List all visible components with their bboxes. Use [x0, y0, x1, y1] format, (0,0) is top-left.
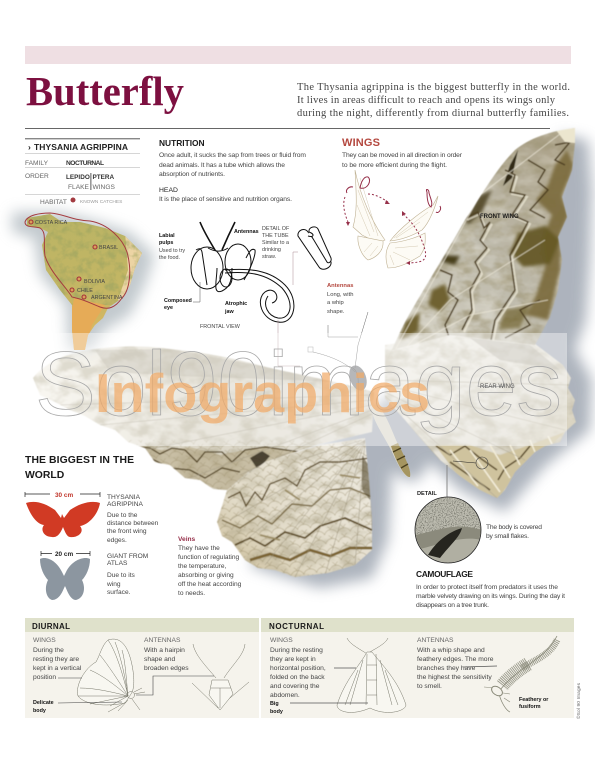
nutrition text: Once adult, it sucks the sap from trees or fluid from [159, 152, 306, 159]
feathery label: Feathery or [519, 697, 549, 703]
nocturnal leader lines [290, 666, 497, 703]
head drawing labels [159, 226, 290, 330]
wings text: They can be moved in all direction in order [342, 152, 463, 159]
panel: nocturnal: NOCTURNAL [269, 622, 324, 631]
intro text: The Thysania agrippina is the biggest butterfly in the world. [297, 82, 570, 93]
head drawing labels: eye [164, 305, 173, 311]
veins callout: They have the [178, 545, 220, 552]
gray butterfly silhouette [40, 558, 90, 600]
thysania info table: KNOWN CATCHES [80, 199, 122, 205]
head drawing labels: Antennas [234, 229, 259, 235]
size comparison texts: wing [106, 581, 121, 588]
20 cm dimension: 20 cm [55, 551, 73, 558]
nutrition text: dead animals. It has a tube which allows the [159, 162, 285, 169]
thysania info table: WINGS [92, 184, 115, 191]
diurnal antenna head drawing [192, 644, 249, 710]
map: country labels: BRASIL [99, 245, 118, 251]
wings text: WINGS [342, 137, 380, 149]
camouflage text: disappears on a tree trunk. [416, 602, 489, 609]
nocturnal antennas text: the highest the sensitivity [417, 674, 492, 681]
diurnal antennas text: broaden edges [144, 665, 189, 672]
head drawing labels: THE TUBE [262, 233, 289, 239]
thysania info table: THYSANIA AGRIPPINA [34, 142, 128, 152]
feathery antenna drawing [484, 636, 557, 712]
camouflage text: marble velvety drawing on its wings. During the day it [416, 593, 565, 600]
left hind wing [216, 438, 373, 578]
thysania info table: HABITAT [40, 199, 67, 206]
nutrition text: absorption of nutrients. [159, 171, 225, 178]
diurnal wings text [33, 637, 82, 681]
diurnal antennas text: With a hairpin [144, 647, 185, 654]
label: front wing: FRONT WING [480, 214, 519, 220]
pink header band [25, 46, 571, 64]
front right wing [392, 128, 576, 350]
intro text: It lives in areas difficult to reach and opens its wings only [297, 95, 556, 106]
map: country labels [35, 220, 123, 301]
nutrition text [159, 138, 306, 203]
head drawing labels: drinking [262, 247, 281, 253]
antennas callout [308, 283, 368, 372]
veins callout [178, 536, 242, 597]
antennas callout: Long, with [327, 292, 353, 298]
big body label: body [270, 709, 283, 715]
biggest in the world section: WORLD [25, 470, 65, 481]
camouflage text: CAMOUFLAGE [416, 569, 473, 579]
habitat map of South America [12, 210, 155, 355]
diurnal wings text: resting they are [33, 656, 79, 663]
head drawing labels: Labial [159, 233, 175, 239]
intro text: during the night, differently from diurnal butterfly families. [297, 108, 569, 119]
size comparison texts: Due to its [107, 572, 136, 579]
wings text: to be more efficient during the flight. [342, 162, 447, 169]
detail lens with leader [415, 457, 542, 563]
thysania info table: PTERA [92, 174, 115, 181]
size comparison texts: edges. [107, 537, 127, 544]
nutrition text: It is the place of sensitive and nutrition organs. [159, 196, 292, 203]
camouflage text: In order to protect itself from predators it uses the [416, 584, 558, 591]
nocturnal moth drawing [337, 638, 406, 712]
nocturnal antennas text: With a whip shape and [417, 647, 485, 654]
credit: ©Sol 90 Images [575, 682, 582, 719]
thysania info table: LEPIDO [66, 174, 90, 181]
rear right wing [380, 330, 580, 502]
body and abdomen [346, 363, 410, 477]
veins callout: off the heat according [178, 581, 242, 588]
veins callout: absorbing or giving [178, 572, 234, 579]
feathery label [519, 697, 549, 710]
thysania info table: NOCTURNAL [66, 160, 104, 167]
30 cm dimension: 30 cm [55, 492, 73, 499]
big body label: Big [270, 701, 279, 707]
delicate body label: body [33, 708, 46, 714]
header rule [25, 128, 550, 129]
veins callout: the temperature, [178, 563, 227, 570]
nocturnal wings text: horizontal position, [270, 665, 326, 672]
antennas callout: shape. [327, 309, 345, 315]
size comparison texts: ATLAS [107, 560, 128, 567]
size comparison texts: distance between [107, 520, 159, 527]
nocturnal wings text [270, 637, 326, 699]
diurnal wings text: position [33, 674, 56, 681]
panel: diurnal [25, 618, 259, 718]
size comparison texts: THYSANIA [107, 494, 141, 501]
wing shadows [250, 135, 592, 588]
head drawing labels: FRONTAL VIEW [200, 324, 241, 330]
diurnal wings text: During the [33, 647, 64, 654]
nocturnal wings text: WINGS [270, 637, 293, 644]
veins callout: Veins [178, 536, 196, 543]
panel: diurnal: DIURNAL [32, 622, 70, 631]
head drawing labels: jaw [224, 309, 234, 315]
thysania info table: › [28, 142, 31, 152]
delicate body label [33, 700, 54, 714]
nutrition text: HEAD [159, 187, 178, 194]
nocturnal antennas text: feathery edges. The more [417, 656, 494, 663]
thysania info table: FLAKE [68, 184, 89, 191]
wing movement diagram [344, 170, 441, 268]
head drawing labels: Similar to a [262, 240, 289, 246]
diurnal antennas text [144, 637, 189, 672]
diurnal leader lines [58, 676, 214, 703]
nocturnal wings text: and covering the [270, 683, 320, 690]
30 cm dimension [25, 492, 100, 499]
delicate body label: Delicate [33, 700, 54, 706]
size comparison texts: AGRIPPINA [107, 501, 144, 508]
head drawing labels: Atrophic [225, 301, 247, 307]
nocturnal wings text: folded on the back [270, 674, 325, 681]
map: habitat range outline [25, 213, 130, 308]
diurnal antennas text: ANTENNAS [144, 637, 181, 644]
nocturnal antennas text: branches they have [417, 665, 476, 672]
biggest in the world section [25, 455, 159, 600]
size comparison texts [106, 494, 159, 596]
map: catch markers [29, 220, 97, 299]
diurnal wings text: kept in a vertical [33, 665, 82, 672]
antennas callout: a whip [327, 300, 344, 306]
biggest in the world section: THE BIGGEST IN THE [25, 455, 134, 466]
nocturnal antennas text: to smell. [417, 683, 442, 690]
panel: nocturnal [261, 618, 574, 718]
antennas callout: Antennas [327, 283, 353, 289]
nocturnal antennas text: ANTENNAS [417, 637, 454, 644]
intro text [297, 82, 570, 119]
size comparison texts: GIANT FROM [107, 553, 148, 560]
map: country labels: COSTA RICA [35, 220, 68, 226]
watermark: Infographics [95, 362, 430, 424]
thysania info table: ORDER [25, 173, 49, 180]
detail lens with leader: DETAIL [417, 491, 437, 497]
camouflage text [416, 569, 565, 609]
detail lens with leader: The body is covered [486, 524, 542, 531]
size comparison texts: surface. [107, 589, 131, 596]
map: country labels: BOLIVIA [84, 279, 105, 285]
watermark: Sol90images [35, 334, 562, 435]
nocturnal wings text: During the resting [270, 647, 323, 654]
label: rear wing: REAR WING [480, 384, 515, 390]
head drawing labels: pulps [159, 240, 173, 246]
head drawing labels: Composed [164, 298, 192, 304]
nutrition text: NUTRITION [159, 138, 205, 148]
20 cm dimension [41, 551, 90, 558]
head anatomy drawing [191, 222, 294, 322]
map: country labels: CHILE [77, 288, 93, 294]
nocturnal wings text: they are kept in [270, 656, 316, 663]
veins callout: to needs. [178, 590, 205, 597]
nocturnal antennas text [417, 637, 494, 690]
red butterfly silhouette [26, 502, 100, 537]
diurnal antennas text: shape and [144, 656, 176, 663]
butterfly illustration [30, 125, 592, 588]
size comparison texts: the front wing [107, 528, 147, 535]
detail lens with leader: by small flakes. [486, 533, 529, 540]
thysania info table: FAMILY [25, 160, 49, 167]
connector: tube detail and proboscis [278, 252, 300, 366]
nocturnal wings text: abdomen. [270, 692, 300, 699]
title: Butterfly [26, 68, 184, 114]
wings text [342, 137, 463, 169]
feathery label: fusiform [519, 704, 541, 710]
head drawing labels: the food. [159, 255, 180, 261]
head drawing labels: Used to try [159, 248, 185, 254]
head drawing labels: straw. [262, 254, 276, 260]
head drawing labels: DETAIL OF [262, 226, 290, 232]
map: country labels: ARGENTINA [91, 295, 123, 301]
left front wing [30, 344, 380, 495]
diurnal wings text: WINGS [33, 637, 56, 644]
big body label [270, 701, 283, 715]
thysania info table [25, 138, 140, 206]
tube detail: rolled straw [298, 227, 331, 269]
diurnal butterfly drawing [77, 639, 145, 712]
veins callout: function of regulating [178, 554, 240, 561]
size comparison texts: Due to the [107, 512, 138, 519]
